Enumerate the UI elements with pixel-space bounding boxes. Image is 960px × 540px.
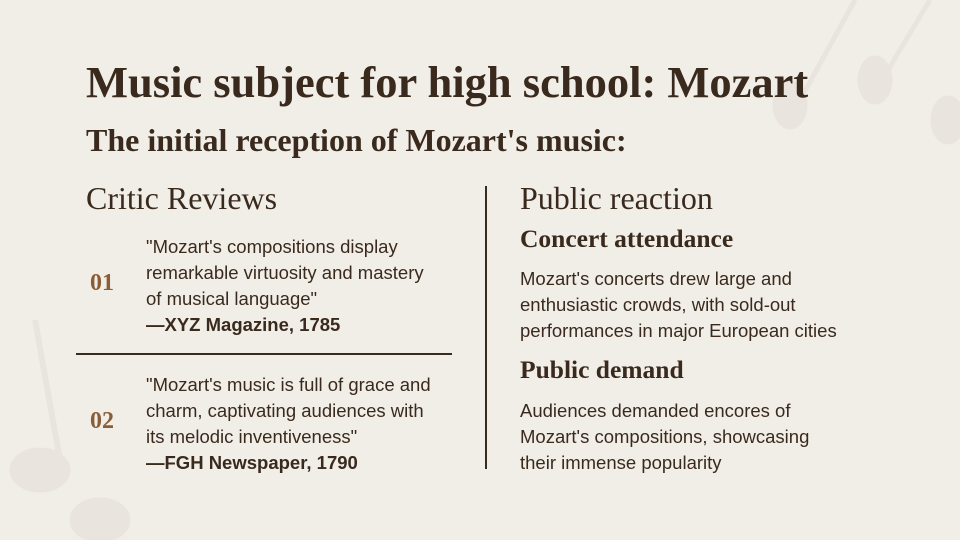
quote 1: —XYZ Magazine, 1785 [146,314,340,335]
subheading: concert attendance: Concert attendance [520,224,733,253]
quote 1: "Mozart's compositions display [146,236,398,257]
subtitle: The initial reception of Mozart's music: [86,122,627,158]
quote 2: —FGH Newspaper, 1790 [146,452,358,473]
text: public demand: their immense popularity [520,452,722,473]
number 01: 01 [90,270,114,296]
text: public demand: Mozart's compositions, showcasing [520,426,809,447]
heading: critic reviews: Critic Reviews [86,180,277,216]
quote 2: "Mozart's music is full of grace and [146,374,431,395]
quote 1 [146,236,424,335]
quote 1: remarkable virtuosity and mastery [146,262,424,283]
review 2 [90,374,431,473]
review 1 [90,236,424,335]
quote 2: charm, captivating audiences with [146,400,424,421]
text: concert attendance [520,268,837,341]
quote 1: of musical language" [146,288,317,309]
text: concert attendance: performances in major European cities [520,320,837,341]
heading: public reaction: Public reaction [520,180,713,216]
text: public demand [520,400,809,473]
text: concert attendance: Mozart's concerts drew large and [520,268,792,289]
quote 2: its melodic inventiveness" [146,426,357,447]
quote 2 [146,374,431,473]
number 02: 02 [90,408,114,434]
text: concert attendance: enthusiastic crowds, with sold-out [520,294,796,315]
subheading: public demand: Public demand [520,355,684,384]
text: public demand: Audiences demanded encores of [520,400,790,421]
title: Music subject for high school: Mozart [86,57,808,107]
